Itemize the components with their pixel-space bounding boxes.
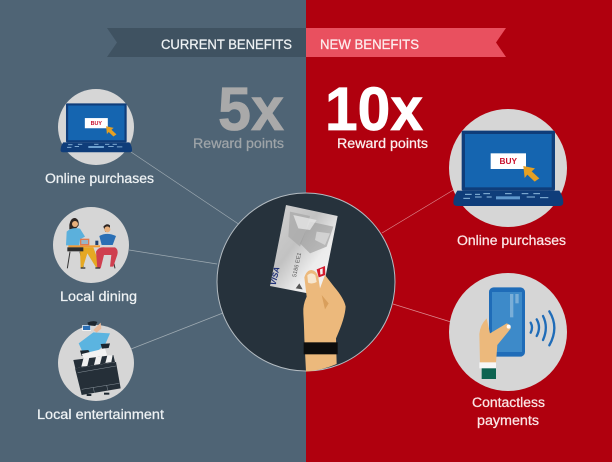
icon: online purchases laptop, current: BUY [91, 121, 102, 127]
stat: 10x reward points: 10x [325, 75, 423, 143]
central circle with card and hand [217, 193, 395, 372]
connector lines [129, 152, 455, 349]
stat: 5x reward points: 5x [218, 75, 284, 143]
panel: current benefits background [0, 0, 306, 462]
icon: credit card [269, 205, 338, 296]
stat: 5x reward points: Reward points [193, 136, 284, 151]
ribbon: new benefits: NEW BENEFITS [320, 37, 419, 52]
ribbon: current benefits: CURRENT BENEFITS [161, 37, 292, 52]
icon: online purchases laptop, current [58, 89, 134, 165]
label: local entertainment: Local entertainment [37, 407, 164, 422]
ribbon: new benefits [306, 28, 506, 57]
icon: online purchases laptop, new [449, 109, 567, 227]
panel: new benefits background [306, 0, 612, 462]
icon: contactless payment [449, 273, 567, 391]
label: contactless payments: payments [477, 413, 539, 428]
icon: hand holding card [303, 270, 346, 372]
stat: 10x reward points: Reward points [337, 136, 428, 151]
ribbon: current benefits [107, 28, 306, 57]
icon: online purchases laptop, new: BUY [500, 156, 518, 166]
icon: local entertainment clapperboard [58, 321, 134, 401]
label: online purchases, current: Online purchases [45, 171, 154, 186]
label: contactless payments: Contactless [472, 395, 545, 410]
icon: credit card: 5186 EE1 [292, 252, 303, 278]
stat: 5x reward points [193, 75, 284, 151]
icon: local dining [53, 207, 129, 283]
label: contactless payments [472, 395, 545, 428]
label: online purchases, new: Online purchases [457, 233, 566, 248]
icon: credit card: VISA [269, 266, 282, 286]
label: local dining: Local dining [60, 289, 137, 304]
